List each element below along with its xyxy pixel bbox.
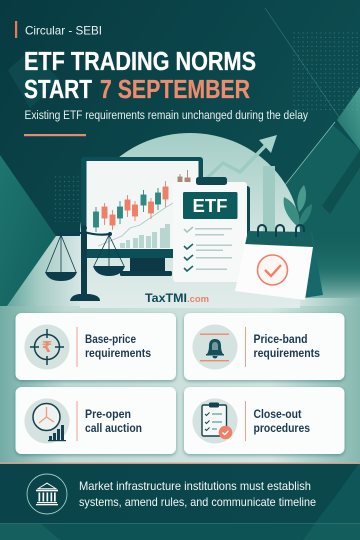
label: Close-out xyxy=(254,409,302,421)
brand: TaxTMI.com: TaxTMI xyxy=(145,293,187,305)
calendar xyxy=(235,225,323,300)
lower light area xyxy=(0,230,360,463)
icon: checklist with badge xyxy=(192,398,238,444)
title: 7 SEPTEMBER xyxy=(100,76,250,104)
label xyxy=(85,334,151,360)
label: Price-band xyxy=(254,334,308,346)
card: base-price requirements xyxy=(16,313,176,380)
label xyxy=(254,334,320,360)
callout text: Market infrastructure institutions must establish xyxy=(79,479,311,493)
label: requirements xyxy=(254,348,320,360)
title xyxy=(24,48,256,104)
footer panel xyxy=(0,462,360,540)
title: START xyxy=(24,76,92,104)
dome backdrop xyxy=(80,133,300,308)
candlesticks xyxy=(94,170,190,232)
title: ETF TRADING NORMS xyxy=(24,48,256,76)
icon: institution building xyxy=(27,474,67,514)
brand: TaxTMI.com: .com xyxy=(187,294,209,305)
callout text: systems, amend rules, and communicate timeline xyxy=(79,495,316,509)
label: Base-price xyxy=(85,334,136,346)
label: requirements xyxy=(85,348,151,360)
volume bars xyxy=(120,224,170,248)
card: price-band requirements xyxy=(184,313,344,380)
monitor xyxy=(81,157,203,276)
card: close-out procedures xyxy=(184,387,344,454)
card: pre-open call auction xyxy=(16,387,176,454)
accent rule xyxy=(24,134,86,136)
brand: TaxTMI.com xyxy=(145,293,209,305)
illustration xyxy=(45,133,323,308)
icon: rupee target: ₹ xyxy=(42,338,52,356)
label xyxy=(85,409,142,435)
label xyxy=(254,409,310,435)
leaves xyxy=(284,185,312,227)
icon: rupee target xyxy=(24,324,70,370)
label: procedures xyxy=(254,423,310,435)
eyebrow: Circular - SEBI: Circular - SEBI xyxy=(25,24,102,38)
label: call auction xyxy=(85,423,142,435)
label: Pre-open xyxy=(85,409,131,421)
scales xyxy=(45,225,125,301)
ETF clipboard xyxy=(173,177,250,282)
callout text xyxy=(79,479,316,509)
subtitle: Existing ETF requirements remain unchanged during the delay xyxy=(24,108,309,122)
icon: bell between bands xyxy=(192,324,238,370)
ETF clipboard: ETF xyxy=(192,195,228,216)
growth arrow and bars xyxy=(206,135,277,236)
icon: clock and bars xyxy=(24,398,70,444)
